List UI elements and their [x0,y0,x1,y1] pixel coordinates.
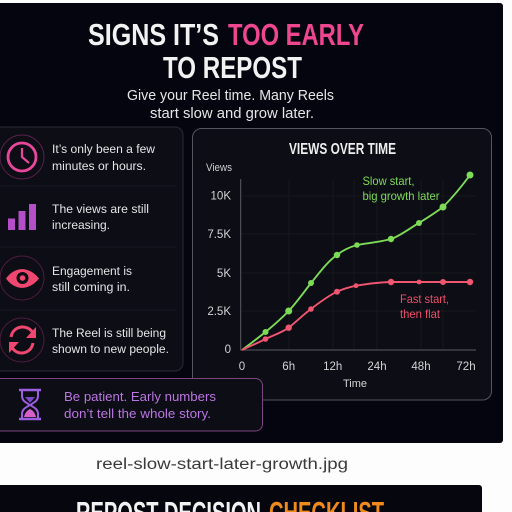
y axis labels: 5K [217,268,231,280]
callout: be patient [0,378,262,431]
x axis labels: 0 [239,361,245,373]
green annotation [362,174,440,203]
sign 4 text [52,326,169,356]
sign 1 text: It’s only been a few [52,142,155,156]
y axis labels [207,190,231,356]
callout text: don’t tell the whole story. [64,406,211,421]
icon: hourglass [19,390,41,419]
x axis labels: 72h [456,361,476,373]
panel: signs list [0,127,183,371]
red annotation [400,292,449,321]
callout text: Be patient. Early numbers [64,389,216,404]
y axis labels: 2.5K [207,306,231,318]
sign 2 text: increasing. [52,218,110,232]
x axis title: Time [343,378,367,390]
icon: refresh arrows [0,318,44,362]
chart heading: VIEWS OVER TIME [289,141,396,158]
red line: fast start [242,279,473,350]
title: TOO EARLY [228,17,364,52]
y axis labels: 10K [211,190,231,202]
subtitle: Give your Reel time. Many Reels [127,88,334,104]
red annotation: Fast start, [400,292,449,306]
sign 3 text: Engagement is [52,264,132,278]
x axis labels: 48h [411,361,431,373]
sign 3 text: still coming in. [52,280,130,294]
x axis labels: 12h [323,361,342,373]
green annotation: big growth later [362,189,440,203]
chart axes [241,179,476,350]
icon: clock [0,135,44,179]
title [88,17,364,85]
subtitle: start slow and grow later. [150,106,314,122]
green annotation: Slow start, [362,174,414,188]
callout text [64,389,216,421]
image caption: reel-slow-start-later-growth.jpg [96,456,348,473]
title: TO REPOST [163,50,302,85]
red annotation: then flat [400,307,441,321]
icon: eye [0,256,44,300]
green line: slow start [242,172,474,350]
y axis labels: 7.5K [207,229,231,241]
sign 4 text: The Reel is still being [52,326,166,340]
sign 1 text: minutes or hours. [52,159,146,173]
title: SIGNS IT’S [88,17,219,52]
panel: views over time chart [192,128,492,400]
sign 1 text [52,142,155,173]
icon: bar chart [0,195,44,239]
y axis title: Views [206,162,233,174]
x axis labels: 24h [367,361,387,373]
subtitle [127,88,334,122]
sign 4 text: shown to new people. [52,342,169,356]
next panel: checklist [0,485,482,512]
sign 2 text [52,202,149,232]
sign 3 text [52,264,132,294]
x axis labels: 6h [282,361,295,373]
sign 2 text: The views are still [52,202,149,216]
x axis labels [239,361,476,373]
y axis labels: 0 [225,344,231,356]
